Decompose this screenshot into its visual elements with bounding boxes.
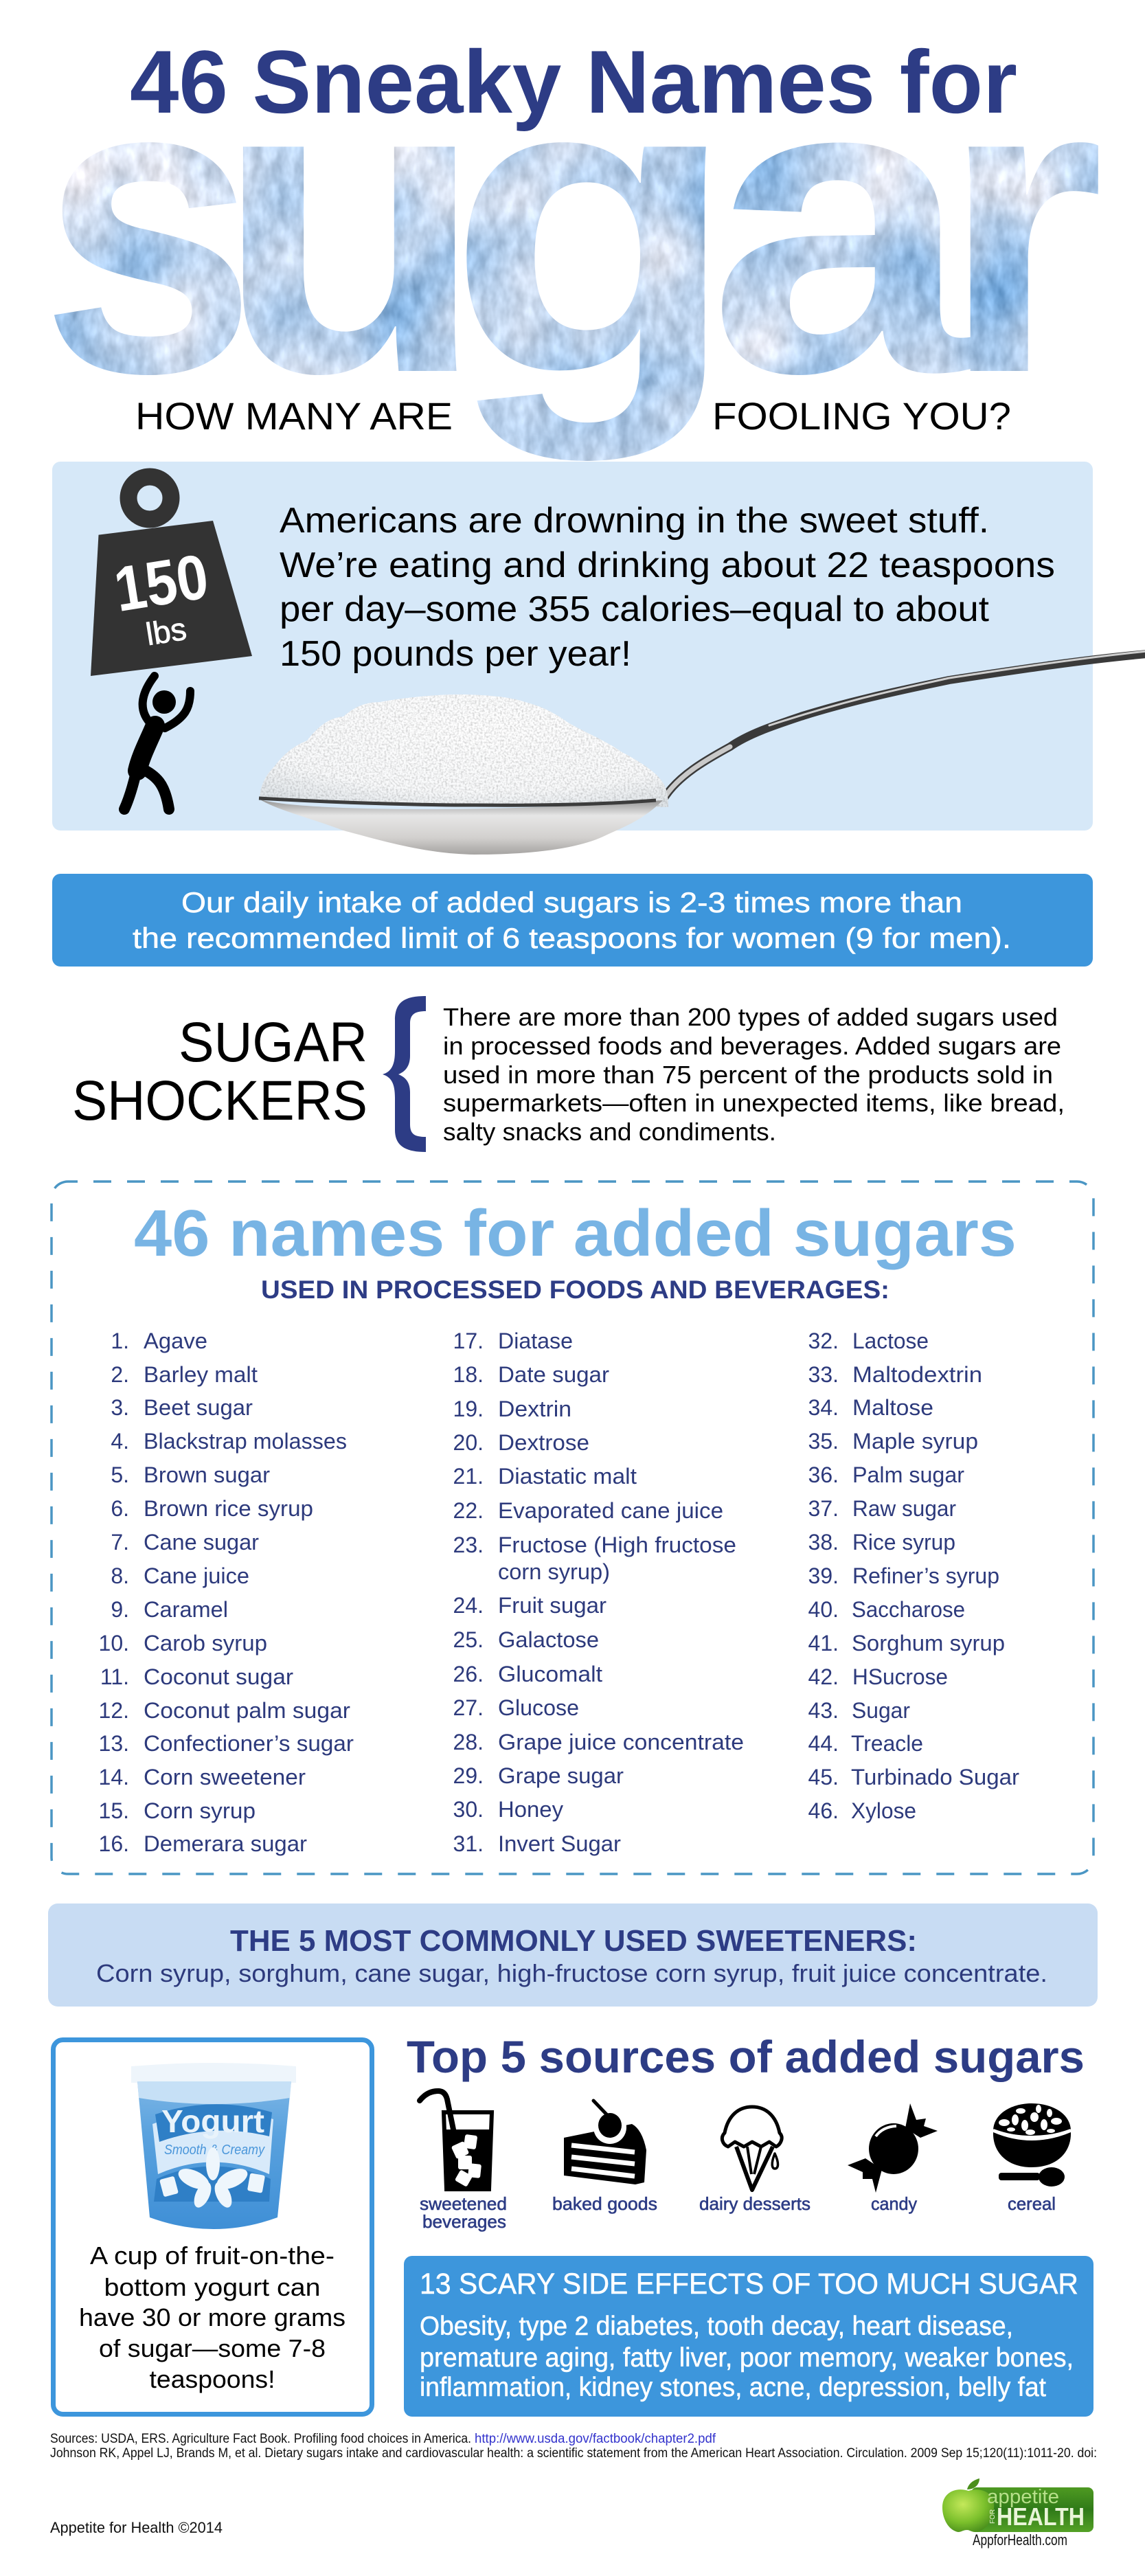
heading: 46 names for added sugars: 46 names for added sugars — [134, 1197, 1017, 1270]
icon: yogurt cup — [131, 2063, 296, 2229]
list column 2: items 17 to 31: Invert Sugar — [498, 1831, 621, 1856]
panel: 13 scary side effects: Obesity, type 2 diabetes, tooth decay, heart disease, — [420, 2312, 1013, 2341]
logo: appetite for health: FOR — [989, 2509, 997, 2524]
icon: curly brace — [383, 996, 426, 1152]
list column 1: items 1 to 16: Corn sweetener — [144, 1765, 306, 1789]
list column 3: items 32 to 46: 46. — [808, 1798, 839, 1823]
text block: Americans intro: per day–some 355 calories–equal to about — [280, 589, 990, 629]
label: cereal: cereal — [1008, 2193, 1056, 2214]
list column 2: items 17 to 31: 27. — [453, 1695, 484, 1720]
list column 3: items 32 to 46: 35. — [808, 1429, 839, 1454]
list column 1: items 1 to 16: Cane juice — [144, 1563, 249, 1588]
label: candy: candy — [871, 2193, 917, 2214]
logo url: AppforHealth.com — [973, 2531, 1067, 2549]
title: 46 Sneaky Names for — [130, 32, 1017, 132]
weight unit: lbs — [144, 611, 189, 652]
sources: Sources: USDA, ERS. Agriculture Fact Book. Profiling food choices in America. — [50, 2432, 471, 2446]
text block: Americans intro — [280, 501, 1055, 674]
list column 3: items 32 to 46: Xylose — [851, 1798, 916, 1823]
text block: Americans intro: Americans are drowning in the sweet stuff. — [280, 501, 989, 541]
big word: sugar: r — [941, 0, 1104, 461]
list column 2: items 17 to 31: Date sugar — [498, 1362, 609, 1387]
list column 2: items 17 to 31: 18. — [453, 1362, 484, 1387]
list column 3: items 32 to 46: Maltose — [852, 1395, 933, 1420]
list column 1: items 1 to 16: Brown sugar — [144, 1462, 270, 1487]
list column 1: items 1 to 16 — [99, 1329, 354, 1856]
panel: 5 most commonly used sweeteners: Corn syrup, sorghum, cane sugar, high-fructose corn syrup, fruit juice concentrate. — [96, 1959, 1047, 1987]
label: dairy desserts: dairy desserts — [699, 2193, 810, 2214]
panel: 5 most commonly used sweeteners — [48, 1903, 1098, 2007]
list column 2: items 17 to 31: Glucomalt — [498, 1662, 602, 1686]
list column 3: items 32 to 46: Maltodextrin — [852, 1362, 982, 1387]
panel: 13 scary side effects: 13 SCARY SIDE EFFECTS OF TOO MUCH SUGAR — [420, 2268, 1078, 2301]
panel: 13 scary side effects — [404, 2256, 1093, 2417]
list column 3: items 32 to 46: 33. — [808, 1362, 839, 1387]
list column 2: items 17 to 31: 21. — [453, 1464, 484, 1489]
list column 1: items 1 to 16: Cane sugar — [144, 1530, 259, 1555]
logo: appetite for health: appetite — [987, 2486, 1059, 2508]
logo: appetite for health — [942, 2478, 1093, 2532]
yogurt caption — [79, 2241, 345, 2393]
text block: sugar shockers paragraph: salty snacks and condiments. — [443, 1118, 776, 1146]
list column 1: items 1 to 16: 5. — [111, 1462, 129, 1487]
list column 3: items 32 to 46: Sugar — [852, 1698, 910, 1723]
banner: daily intake: the recommended limit of 6 teaspoons for women (9 for men). — [133, 922, 1011, 954]
big word: sugar: a — [708, 0, 975, 461]
list column 2: items 17 to 31: 20. — [453, 1430, 484, 1455]
list column 3: items 32 to 46: Turbinado Sugar — [851, 1765, 1019, 1789]
list column 1: items 1 to 16: Demerara sugar — [144, 1831, 307, 1856]
list column 2: items 17 to 31: 19. — [453, 1397, 484, 1421]
list column 2: items 17 to 31: 30. — [453, 1797, 484, 1822]
list column 1: items 1 to 16: 9. — [111, 1597, 129, 1622]
list column 1: items 1 to 16: 6. — [111, 1496, 129, 1521]
list column 3: items 32 to 46: 32. — [808, 1329, 839, 1353]
list column 1: items 1 to 16: Brown rice syrup — [144, 1496, 313, 1521]
icon: person lifting weight — [124, 676, 190, 809]
list column 3: items 32 to 46: 34. — [808, 1395, 839, 1420]
list column 2: items 17 to 31: Diatase — [498, 1329, 573, 1353]
list column 1: items 1 to 16: 14. — [99, 1765, 129, 1789]
list column 3: items 32 to 46: Maple syrup — [852, 1429, 978, 1454]
panel: 13 scary side effects: premature aging, fatty liver, poor memory, weaker bones, — [420, 2343, 1074, 2373]
heading: sugar shockers: SUGAR — [179, 1011, 367, 1074]
list column 2: items 17 to 31: Grape sugar — [498, 1763, 624, 1788]
list column 3: items 32 to 46: Treacle — [851, 1731, 923, 1756]
list column 3: items 32 to 46: 43. — [808, 1698, 839, 1723]
icon: spoon of sugar — [259, 651, 1145, 855]
panel: 5 most commonly used sweeteners: THE 5 MOST COMMONLY USED SWEETENERS: — [230, 1924, 917, 1958]
list column 3: items 32 to 46: 38. — [808, 1530, 839, 1555]
heading: top 5 sources: Top 5 sources of added sugars — [407, 2031, 1085, 2082]
panel: dashed names box — [52, 1182, 1093, 1874]
heading: sugar shockers: SHOCKERS — [72, 1070, 367, 1132]
label: baked goods: baked goods — [552, 2193, 657, 2214]
list column 2: items 17 to 31: 23. — [453, 1533, 484, 1557]
icon: 150 lbs weight — [91, 477, 252, 676]
list column 1: items 1 to 16: Caramel — [144, 1597, 228, 1622]
yogurt label word: Yogurt — [161, 2103, 264, 2139]
list column 1: items 1 to 16: 12. — [99, 1698, 129, 1723]
list column 1: items 1 to 16: 2. — [111, 1362, 129, 1387]
list column 3: items 32 to 46: Sorghum syrup — [852, 1631, 1005, 1656]
list column 2: items 17 to 31: corn syrup) — [498, 1559, 610, 1584]
list column 2: items 17 to 31: Diastatic malt — [498, 1464, 637, 1489]
sources: Johnson RK, Appel LJ, Brands M, et al. Dietary sugars intake and cardiovascular health: a scientific statement from the American Heart Association. Circulation. 2009 Sep 15;120(11):1011-20. doi: — [50, 2446, 1097, 2461]
list column 3: items 32 to 46: Rice syrup — [852, 1530, 955, 1555]
list column 3: items 32 to 46: 41. — [808, 1631, 839, 1656]
spoon rim — [259, 798, 656, 805]
list column 1: items 1 to 16: 8. — [111, 1563, 129, 1588]
list column 2: items 17 to 31: 22. — [453, 1498, 484, 1523]
subtitle right: FOOLING YOU? — [712, 394, 1011, 438]
list column 3: items 32 to 46: 42. — [808, 1664, 839, 1689]
icon: dairy dessert — [722, 2107, 782, 2190]
text block: sugar shockers paragraph: used in more than 75 percent of the products sold in — [443, 1061, 1053, 1089]
label: sweetened beverages — [420, 2193, 507, 2232]
list column 1: items 1 to 16: 1. — [111, 1329, 129, 1353]
list column 3: items 32 to 46: 44. — [808, 1731, 839, 1756]
list column 3: items 32 to 46: 40. — [808, 1597, 839, 1622]
sources: http://www.usda.gov/factbook/chapter2.pdf — [475, 2432, 716, 2446]
list column 2: items 17 to 31: 25. — [453, 1627, 484, 1652]
list column 3: items 32 to 46: Saccharose — [852, 1597, 965, 1622]
list column 1: items 1 to 16: 11. — [100, 1664, 129, 1689]
list column 3: items 32 to 46: Palm sugar — [852, 1462, 964, 1487]
list column 1: items 1 to 16: 16. — [99, 1831, 129, 1856]
yogurt label tagline: Smooth & Creamy — [164, 2143, 265, 2158]
logo: appetite for health: HEALTH — [997, 2502, 1085, 2531]
spoon bowl — [259, 799, 663, 855]
text block: sugar shockers paragraph: There are more than 200 types of added sugars used — [443, 1003, 1058, 1031]
icon: candy — [848, 2103, 938, 2193]
list column 2: items 17 to 31: 26. — [453, 1662, 484, 1686]
list column 1: items 1 to 16: Corn syrup — [144, 1798, 256, 1823]
list column 2: items 17 to 31: 28. — [453, 1730, 484, 1754]
list column 1: items 1 to 16: Coconut sugar — [144, 1664, 293, 1689]
list column 1: items 1 to 16: 4. — [111, 1429, 129, 1454]
list column 3: items 32 to 46: 37. — [808, 1496, 839, 1521]
list column 3: items 32 to 46: HSucrose — [852, 1664, 948, 1689]
heading: sugar shockers — [72, 1011, 367, 1132]
list column 1: items 1 to 16: 3. — [111, 1395, 129, 1420]
yogurt caption: have 30 or more grams — [79, 2303, 345, 2331]
copyright: Appetite for Health ©2014 — [50, 2519, 223, 2536]
yogurt caption: of sugar—some 7-8 — [99, 2334, 326, 2362]
yogurt caption: bottom yogurt can — [104, 2273, 320, 2301]
list column 2: items 17 to 31: Evaporated cane juice — [498, 1498, 723, 1523]
subheading: used in processed foods: USED IN PROCESSED FOODS AND BEVERAGES: — [261, 1276, 889, 1304]
list column 1: items 1 to 16: Beet sugar — [144, 1395, 253, 1420]
subtitle left: HOW MANY ARE — [135, 394, 453, 438]
list column 2: items 17 to 31: Fruit sugar — [498, 1593, 606, 1618]
list column 1: items 1 to 16: Blackstrap molasses — [144, 1429, 347, 1454]
yogurt caption: teaspoons! — [150, 2365, 275, 2393]
panel: yogurt card — [54, 2040, 372, 2414]
list column 2: items 17 to 31: Fructose (High fructose — [498, 1533, 736, 1557]
list column 2: items 17 to 31: Dextrose — [498, 1430, 589, 1455]
text block: Americans intro: We’re eating and drinking about 22 teaspoons — [280, 545, 1055, 585]
list column 3: items 32 to 46: 45. — [808, 1765, 839, 1789]
list column 2: items 17 to 31: Glucose — [498, 1695, 579, 1720]
label: sweetened beverages: beverages — [422, 2211, 506, 2232]
icon: cereal bowl — [993, 2103, 1071, 2187]
list column 2: items 17 to 31: Grape juice concentrate — [498, 1730, 744, 1754]
spoon handle — [663, 651, 1145, 800]
list column 1: items 1 to 16: Carob syrup — [144, 1631, 267, 1656]
list column 1: items 1 to 16: Agave — [144, 1329, 207, 1353]
list column 1: items 1 to 16: 10. — [99, 1631, 129, 1656]
icon: baked goods — [564, 2101, 646, 2184]
big word: sugar: u — [216, 0, 486, 461]
list column 3: items 32 to 46: Lactose — [852, 1329, 929, 1353]
big word: sugar: s — [41, 0, 257, 461]
text block: sugar shockers paragraph — [443, 1003, 1065, 1146]
list column 3: items 32 to 46: Raw sugar — [852, 1496, 956, 1521]
list column 1: items 1 to 16: 7. — [111, 1530, 129, 1555]
text block: sugar shockers paragraph: in processed foods and beverages. Added sugars are — [443, 1032, 1061, 1060]
big word: sugar: g — [447, 0, 738, 464]
banner: daily intake: Our daily intake of added sugars is 2-3 times more than — [181, 886, 962, 918]
list column 3: items 32 to 46: 36. — [808, 1462, 839, 1487]
list column 2: items 17 to 31: 17. — [453, 1329, 484, 1353]
list column 1: items 1 to 16: Barley malt — [144, 1362, 258, 1387]
list column 3: items 32 to 46 — [808, 1329, 1019, 1823]
panel: 150 pounds background — [52, 462, 1093, 831]
text block: Americans intro: 150 pounds per year! — [280, 634, 631, 674]
list column 1: items 1 to 16: Confectioner’s sugar — [144, 1731, 354, 1756]
icon: sweetened beverage — [420, 2091, 492, 2189]
sources — [50, 2432, 1097, 2461]
list column 1: items 1 to 16: 15. — [99, 1798, 129, 1823]
list column 3: items 32 to 46: 39. — [808, 1563, 839, 1588]
list column 3: items 32 to 46: Refiner’s syrup — [852, 1563, 999, 1588]
list column 1: items 1 to 16: 13. — [99, 1731, 129, 1756]
weight number: 150 — [110, 541, 213, 625]
panel: 13 scary side effects: inflammation, kidney stones, acne, depression, belly fat — [420, 2373, 1046, 2402]
text block: sugar shockers paragraph: supermarkets—often in unexpected items, like bread, — [443, 1089, 1065, 1117]
label: sweetened beverages: sweetened — [420, 2193, 507, 2214]
list column 2: items 17 to 31 — [453, 1329, 744, 1856]
sugar pile — [260, 694, 668, 807]
list column 1: items 1 to 16: Coconut palm sugar — [144, 1698, 350, 1723]
yogurt caption: A cup of fruit-on-the- — [90, 2241, 335, 2270]
list column 2: items 17 to 31: Honey — [498, 1797, 563, 1822]
list column 2: items 17 to 31: Galactose — [498, 1627, 599, 1652]
list column 2: items 17 to 31: 29. — [453, 1763, 484, 1788]
list column 2: items 17 to 31: 31. — [453, 1831, 484, 1856]
list column 2: items 17 to 31: 24. — [453, 1593, 484, 1618]
list column 2: items 17 to 31: Dextrin — [498, 1397, 571, 1421]
banner: daily intake — [52, 874, 1093, 967]
